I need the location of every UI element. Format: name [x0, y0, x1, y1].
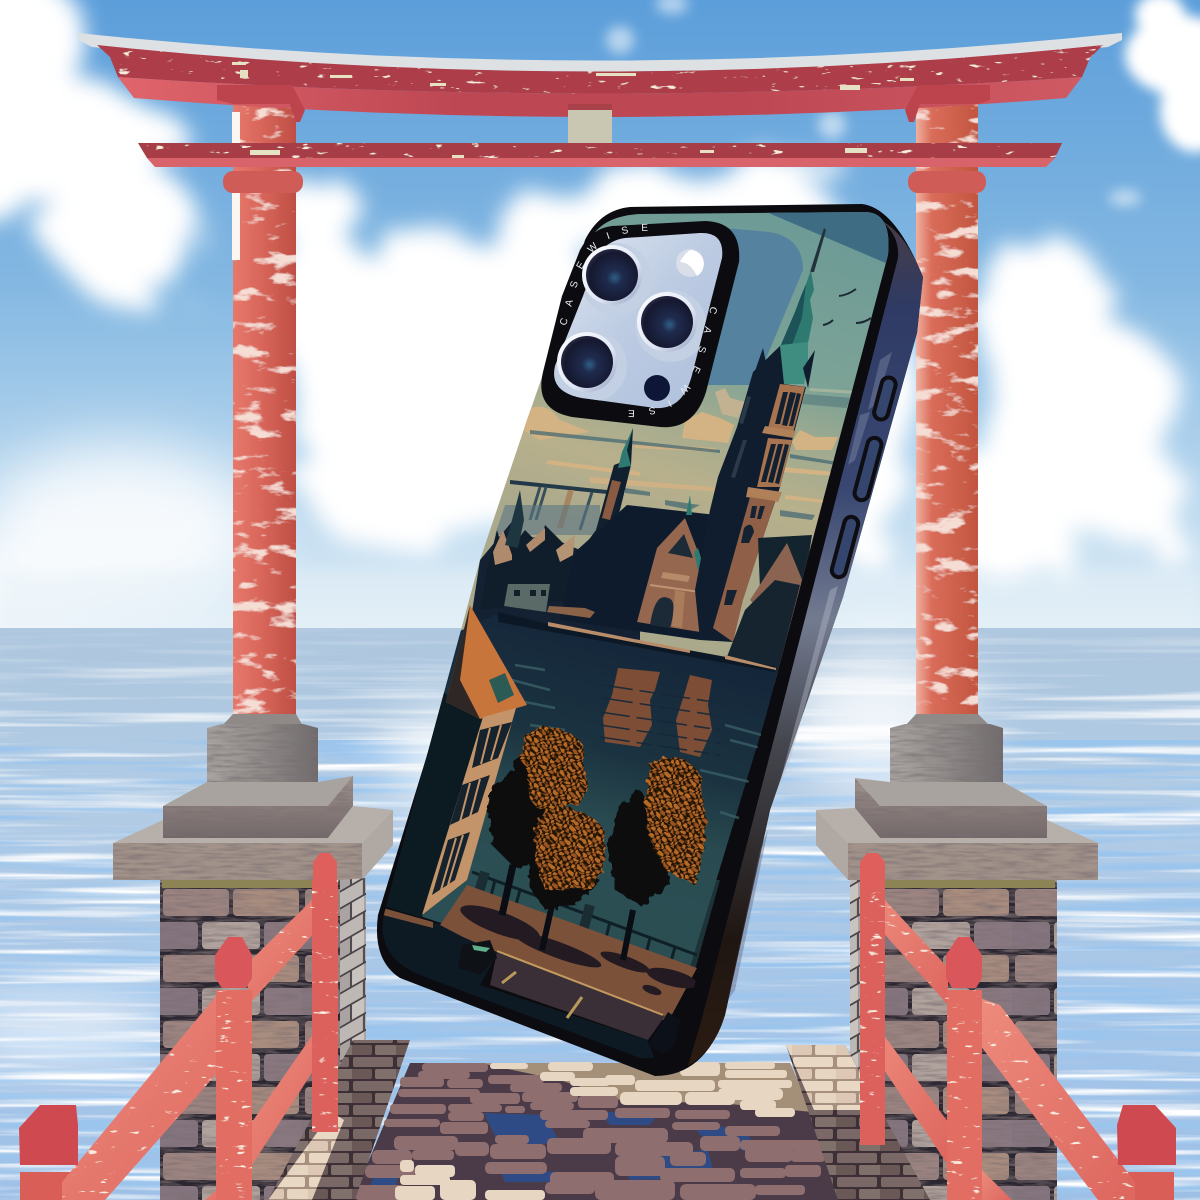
church green detail	[694, 548, 701, 570]
phone side face	[688, 220, 923, 1066]
block top	[163, 776, 353, 806]
side buttons	[830, 376, 897, 579]
middle post	[216, 990, 252, 1200]
street	[490, 952, 665, 1040]
far post	[860, 880, 885, 1145]
car	[458, 940, 497, 975]
small spire	[588, 428, 633, 540]
ring	[222, 714, 303, 726]
lens halos	[555, 243, 707, 402]
lower rail near	[205, 1170, 240, 1200]
tower small windows	[724, 506, 765, 605]
upper rail near	[62, 996, 242, 1200]
tower spire	[810, 228, 826, 272]
upper rail far	[870, 896, 948, 1005]
lidar sensor	[644, 375, 670, 401]
stone walkway	[268, 1040, 930, 1200]
left upper collar	[217, 85, 305, 122]
tower band	[762, 426, 796, 438]
brand text: upper left: CASEWISE	[560, 224, 648, 325]
top beam underside	[118, 77, 1082, 117]
slab side	[362, 810, 393, 880]
kerb line	[497, 951, 663, 1015]
pillar glare	[232, 112, 240, 260]
cloud: upper right	[1125, 0, 1200, 152]
lane marks	[502, 972, 582, 1018]
dark cloud bands	[530, 394, 852, 520]
torii gate	[78, 33, 1122, 720]
right pillar	[916, 100, 978, 720]
left pillar	[233, 100, 296, 720]
camera plate	[554, 233, 722, 408]
pier side	[340, 878, 366, 1070]
cloud wisps: top	[606, 0, 1141, 206]
sidewalk far strip	[383, 908, 433, 928]
tower dark face slits	[731, 396, 751, 478]
screen illustration	[370, 205, 900, 1070]
side reflections	[728, 352, 892, 1000]
lens: middle	[637, 292, 697, 352]
lens: top	[582, 245, 642, 305]
left houses	[480, 525, 575, 612]
bridge	[495, 480, 607, 535]
block	[163, 776, 353, 838]
sidewalk	[440, 885, 697, 1022]
slab side	[816, 810, 848, 880]
foreground shadow	[370, 905, 660, 1070]
river reflection dark bands	[600, 685, 720, 755]
tower lower brick	[713, 497, 775, 642]
brick pier	[878, 880, 1057, 1200]
top beam edge	[78, 33, 1122, 72]
slab front	[113, 843, 362, 880]
facade windows	[432, 722, 512, 895]
left lower collar	[223, 171, 303, 193]
lower water colour	[470, 860, 720, 970]
small left spire	[505, 490, 524, 548]
far post cap	[860, 853, 885, 888]
block top	[855, 778, 1047, 806]
cloud: right	[940, 240, 1190, 585]
church body	[578, 505, 710, 640]
church facade	[637, 518, 705, 632]
right stone base	[816, 714, 1098, 1200]
birds	[823, 289, 871, 325]
tree 1 shade	[488, 737, 550, 868]
camera bumper	[541, 221, 739, 427]
facade window mullions	[441, 725, 501, 890]
sea streaks: blue	[0, 740, 1200, 1200]
left border stones	[268, 1040, 410, 1200]
trunks	[502, 865, 633, 960]
right railing	[860, 853, 1176, 1200]
cloud: lower left	[0, 445, 260, 630]
sea reflection glow	[0, 650, 970, 1060]
lens: lower	[557, 332, 617, 392]
tower dark face	[695, 346, 806, 642]
house facade	[422, 708, 516, 915]
upper rail near	[980, 998, 1135, 1200]
shaded stones	[355, 1063, 830, 1200]
camera module	[541, 221, 740, 428]
house dark side	[380, 690, 483, 918]
left pinnacle	[756, 348, 766, 370]
roof window	[489, 673, 514, 703]
main tower	[695, 228, 826, 642]
moss band	[880, 880, 1055, 888]
phone	[376, 204, 923, 1076]
drum	[890, 724, 1003, 790]
sky background	[0, 0, 1200, 630]
fence	[465, 872, 697, 968]
slab front	[848, 843, 1098, 880]
calm water near horizon	[0, 628, 1200, 748]
tower upper brick	[768, 384, 805, 433]
near post	[1120, 1172, 1174, 1200]
sidewalk shadows	[457, 898, 699, 997]
clouds	[0, 0, 1200, 630]
skyline far mass	[470, 518, 640, 640]
quay light strip	[548, 622, 776, 670]
walkway base	[352, 1063, 845, 1200]
upper belfry windows	[775, 392, 801, 426]
right border stones	[786, 1045, 930, 1200]
second beam upper face	[138, 143, 1062, 158]
sunlit stones	[395, 1062, 795, 1200]
far post cap	[313, 853, 337, 888]
left railing	[19, 853, 338, 1200]
sea streaks: white	[0, 628, 1200, 1200]
tower lower band	[746, 487, 782, 502]
right houses	[725, 535, 812, 672]
river	[370, 615, 780, 1000]
illustration sky	[446, 212, 888, 685]
right lower collar	[908, 171, 986, 193]
tree 2 foliage	[534, 805, 605, 890]
button: volume down	[830, 515, 860, 579]
brand text: lower right: CASEWISE	[628, 307, 717, 418]
near post	[20, 1172, 76, 1200]
tree 1 foliage	[518, 728, 587, 810]
left stone base	[113, 714, 393, 1200]
brick pier	[160, 880, 340, 1200]
centre strut	[568, 104, 612, 144]
lower rail far	[252, 1027, 330, 1165]
tower dome shadow	[780, 284, 806, 347]
quay edge	[498, 612, 775, 672]
ring	[905, 714, 990, 726]
slab top	[816, 808, 1098, 843]
top corner sky band	[768, 212, 888, 263]
button: action	[873, 376, 897, 421]
lower rail near	[982, 1170, 1012, 1200]
second beam underside	[147, 158, 1055, 167]
cloud: upper left	[0, 0, 210, 297]
camera reflection panel	[708, 228, 803, 385]
drum	[207, 724, 318, 790]
house roof	[446, 605, 527, 719]
house roof shadow	[446, 605, 480, 719]
top beam upper face	[97, 45, 1103, 94]
right border sunlit stones	[786, 1045, 880, 1110]
boats on quay	[547, 606, 595, 618]
left border sunlit stones	[268, 1112, 344, 1200]
street bush shadow	[648, 1012, 680, 1062]
near post cap	[19, 1105, 78, 1165]
sea	[0, 628, 1200, 1200]
river reflections	[603, 668, 712, 757]
trees	[488, 728, 707, 960]
slab top	[113, 806, 393, 843]
middle post	[947, 990, 982, 1200]
right upper collar	[905, 85, 990, 122]
church gable spike	[686, 495, 692, 515]
flash	[676, 249, 704, 277]
button: volume up	[853, 436, 883, 502]
far post	[312, 880, 338, 1132]
lower rail far	[868, 1028, 948, 1165]
tower roof green	[780, 342, 808, 384]
near post cap	[1117, 1105, 1176, 1165]
pier side	[850, 880, 878, 1200]
water ripples	[512, 665, 768, 820]
tower dome	[780, 270, 814, 347]
orange house	[380, 605, 527, 918]
phone case body	[377, 204, 923, 1076]
cloud: centre	[268, 159, 910, 570]
tree 3 shade	[607, 790, 670, 905]
right pinnacle	[803, 350, 815, 388]
middle post cap	[215, 937, 252, 988]
paint flecks	[232, 62, 914, 158]
middle belfry windows	[761, 444, 789, 484]
middle post cap	[946, 937, 982, 988]
lit mortar	[480, 1063, 812, 1112]
block	[855, 778, 1047, 838]
tree 2 shade	[528, 860, 600, 910]
puddles	[368, 1112, 760, 1192]
tree 3 foliage	[645, 757, 707, 885]
tower middle brick	[757, 438, 792, 487]
sunset clouds	[520, 388, 856, 503]
horizon haze	[0, 570, 1200, 630]
moss band	[162, 880, 338, 888]
upper rail far	[245, 896, 330, 1003]
